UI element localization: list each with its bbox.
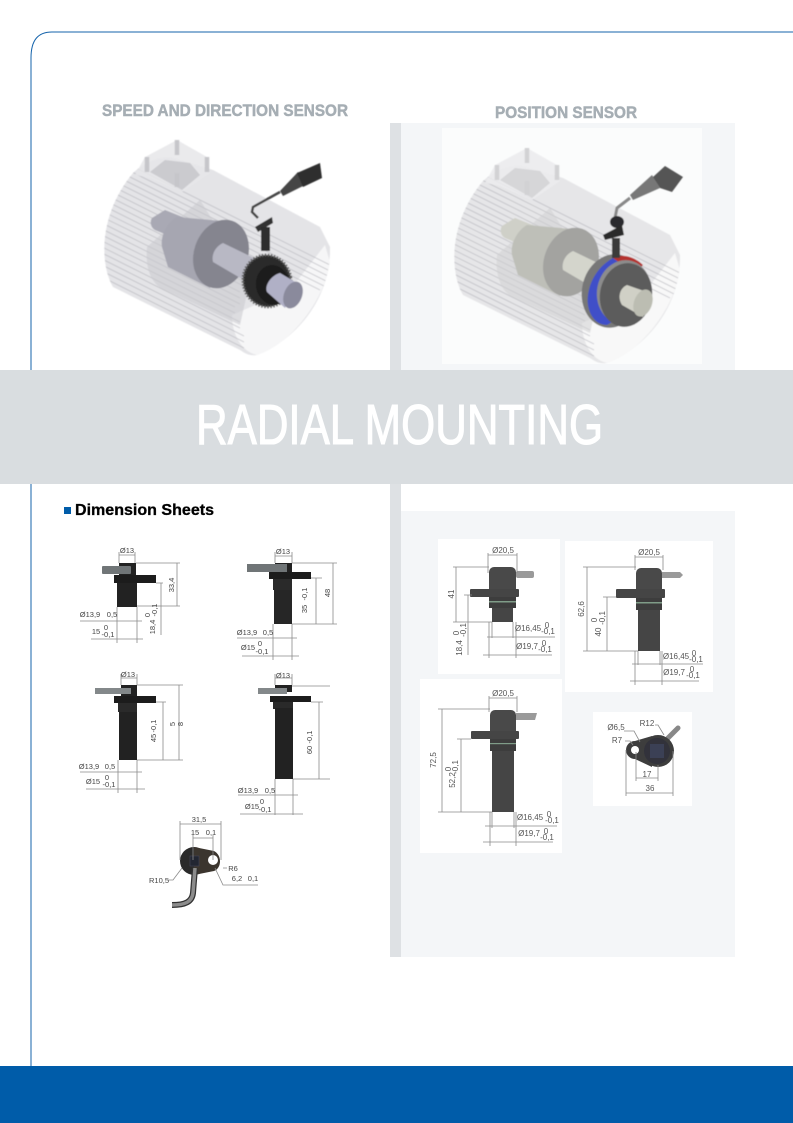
heading: speed and direction sensor: SPEED AND DIRECTION SENSOR: [102, 101, 348, 120]
motor illustration: speed and direction sensor: [100, 140, 340, 355]
dimension drawing: card 62,6: -0,1: [686, 671, 700, 680]
dimension drawing: card 72,5: 0: [547, 810, 552, 819]
dimension drawing: short sensor 33,4: 0: [143, 613, 152, 617]
dimension drawing: sensor 45: Ø15: [86, 777, 100, 786]
dimension drawing: card 62,6: [577, 548, 703, 685]
dimension drawing: short sensor 33,4: 18,4: [148, 620, 157, 634]
dimension drawing: card 41: Ø16,45: [515, 624, 542, 633]
dimension drawing: card 41: 0: [545, 621, 550, 630]
dimension drawing: card top view: Ø6,5: [607, 723, 625, 732]
dimension drawing: short sensor 33,4: 0,5: [107, 610, 117, 619]
dimension drawing: card top view: 36: [646, 784, 655, 793]
dimension drawing: card 72,5: 0: [544, 827, 549, 836]
dimension drawing: sensor 48: 48: [323, 589, 332, 597]
dimension drawing: short sensor 33,4: [80, 546, 180, 643]
dimension drawing: card 41: 0: [452, 630, 461, 635]
dimension drawing: short sensor 33,4: 15: [92, 627, 100, 636]
dimension drawing: card 72,5: [429, 689, 559, 846]
dimension drawing: card 72,5: 72,5: [429, 752, 438, 768]
dimension drawing: card 62,6: 0: [692, 649, 697, 658]
dimension drawing: card 72,5: -0,1: [545, 816, 559, 825]
dimension drawing: card 41: 18,4: [455, 640, 464, 656]
dimension drawing: sensor 60: [238, 671, 330, 815]
title band: radial mounting: [0, 370, 793, 484]
dimension drawing: sensor 60: 60: [305, 746, 314, 754]
dimension drawing: sensor 48: -0,1: [256, 647, 268, 656]
dimension drawing: card 72,5: 0: [444, 766, 453, 771]
dimension drawing: short sensor 33,4: -0,1: [102, 630, 114, 639]
dimension drawing: top view small sensor: 6,2: [232, 874, 242, 883]
title band: radial mounting: RADIAL MOUNTING: [196, 393, 603, 457]
dimension drawing: card 62,6: Ø16,45: [663, 652, 690, 661]
dimension drawing: top view small sensor: 0,1: [248, 874, 258, 883]
dimension drawing: sensor 48: Ø13: [276, 547, 290, 556]
dimension drawing: card 62,6: -0,1: [689, 655, 703, 664]
dimension drawing: sensor 60: 0,5: [265, 786, 275, 795]
dimension drawing: sensor 45: 8: [176, 722, 185, 726]
dimension drawing: short sensor 33,4: 0: [104, 623, 108, 632]
dimension drawing: short sensor 33,4: 33,4: [167, 578, 176, 592]
dimension drawing: sensor 48: 0,5: [263, 628, 273, 637]
dimension drawing: card 41: Ø20,5: [492, 546, 514, 555]
dimension drawing: sensor 45: -0,1: [149, 720, 158, 732]
dimension drawing: card 72,5: 52,2: [448, 772, 457, 788]
dimension drawing: card 41: -0,1: [541, 627, 555, 636]
dimension drawing: top view small sensor: R10,5: [149, 876, 169, 885]
footer bar: [0, 1066, 793, 1123]
dimension drawing: card 62,6: 0: [690, 665, 695, 674]
dimension drawing: card 72,5: Ø19,7: [518, 829, 540, 838]
dimension drawing: card top view: R12: [640, 719, 655, 728]
dimension drawing: card top view: 17: [643, 770, 652, 779]
dimension drawing: sensor 45: 0,5: [105, 762, 115, 771]
dimension drawing: card 41: Ø19,7: [516, 642, 538, 651]
dimension drawing: short sensor 33,4: Ø13,9: [80, 610, 100, 619]
dimension drawing: card 41: [447, 546, 555, 658]
dimension drawing: short sensor 33,4: Ø13: [120, 546, 134, 555]
dimension drawing: sensor 45: 5: [168, 722, 177, 726]
dimension drawing: card 62,6: Ø19,7: [663, 668, 685, 677]
dimension drawing: card 62,6: Ø20,5: [638, 548, 660, 557]
dimension drawing: sensor 48: Ø13,9: [237, 628, 257, 637]
panel: right dimension sheets background: [390, 484, 735, 957]
dimension drawing: sensor 45: Ø13,9: [79, 762, 99, 771]
dimension drawing: card 72,5: Ø16,45: [517, 813, 544, 822]
dimension drawing: top view small sensor: 31,5: [192, 815, 206, 824]
dimension drawing: card 62,6: 0: [590, 617, 599, 622]
dimension drawing: sensor 60: Ø13: [276, 671, 290, 680]
panel: position sensor background: [390, 123, 735, 370]
dimension drawing: sensor 60: -0,1: [305, 731, 314, 743]
dimension drawing: sensor 48: 0: [258, 639, 262, 648]
dimension drawing: card 62,6: 62,6: [577, 601, 586, 617]
dimension drawing: card top view: [607, 719, 678, 796]
motor illustration: position sensor: [450, 148, 690, 363]
dimension drawing: sensor 60: Ø15: [245, 802, 259, 811]
dimension drawing: sensor 45: 45: [149, 734, 158, 742]
dimension drawing: sensor 48: [237, 547, 337, 660]
dimension drawing: sensor 45: Ø13: [121, 670, 135, 679]
dimension drawing: card 72,5: Ø20,5: [492, 689, 514, 698]
dimension drawing: card 72,5: -0,1: [540, 833, 554, 842]
dimension drawing: top view small sensor: 0,1: [206, 828, 216, 837]
dimension drawing: card 72,5: -0,1: [451, 760, 460, 774]
dimension drawing: card 41: -0,1: [538, 645, 552, 654]
dimension drawing: card 41: 0: [542, 639, 547, 648]
dimension drawing: sensor 45: [79, 670, 185, 793]
dimension drawing: sensor 48: -0,1: [300, 588, 309, 600]
dimension drawing: top view small sensor: R6: [228, 864, 238, 873]
dimension drawing: sensor 45: -0,1: [103, 780, 115, 789]
dimension drawing: short sensor 33,4: -0,1: [150, 604, 159, 616]
dimension drawing: card 41: 41: [447, 589, 456, 598]
dimension drawing: sensor 45: 0: [105, 773, 109, 782]
dimension drawing: card 62,6: -0,1: [598, 611, 607, 625]
dimension drawing: card top view: R7: [612, 736, 623, 745]
dimension drawing: top view small sensor: 15: [191, 828, 199, 837]
dimension drawing: sensor 60: Ø13,9: [238, 786, 258, 795]
dimension drawing: sensor 60: 0: [260, 797, 264, 806]
dimension drawing: sensor 48: Ø15: [241, 643, 255, 652]
dimension drawing: sensor 60: -0,1: [259, 805, 271, 814]
dimension drawing: card 62,6: 40: [594, 627, 603, 636]
heading: position sensor: POSITION SENSOR: [495, 103, 637, 122]
heading: dimension sheets: Dimension Sheets: [75, 502, 214, 519]
dimension drawing: sensor 48: 35: [300, 605, 309, 613]
dimension drawing: card 41: -0,1: [459, 623, 468, 637]
dimension drawing: top view small sensor: [149, 815, 258, 905]
